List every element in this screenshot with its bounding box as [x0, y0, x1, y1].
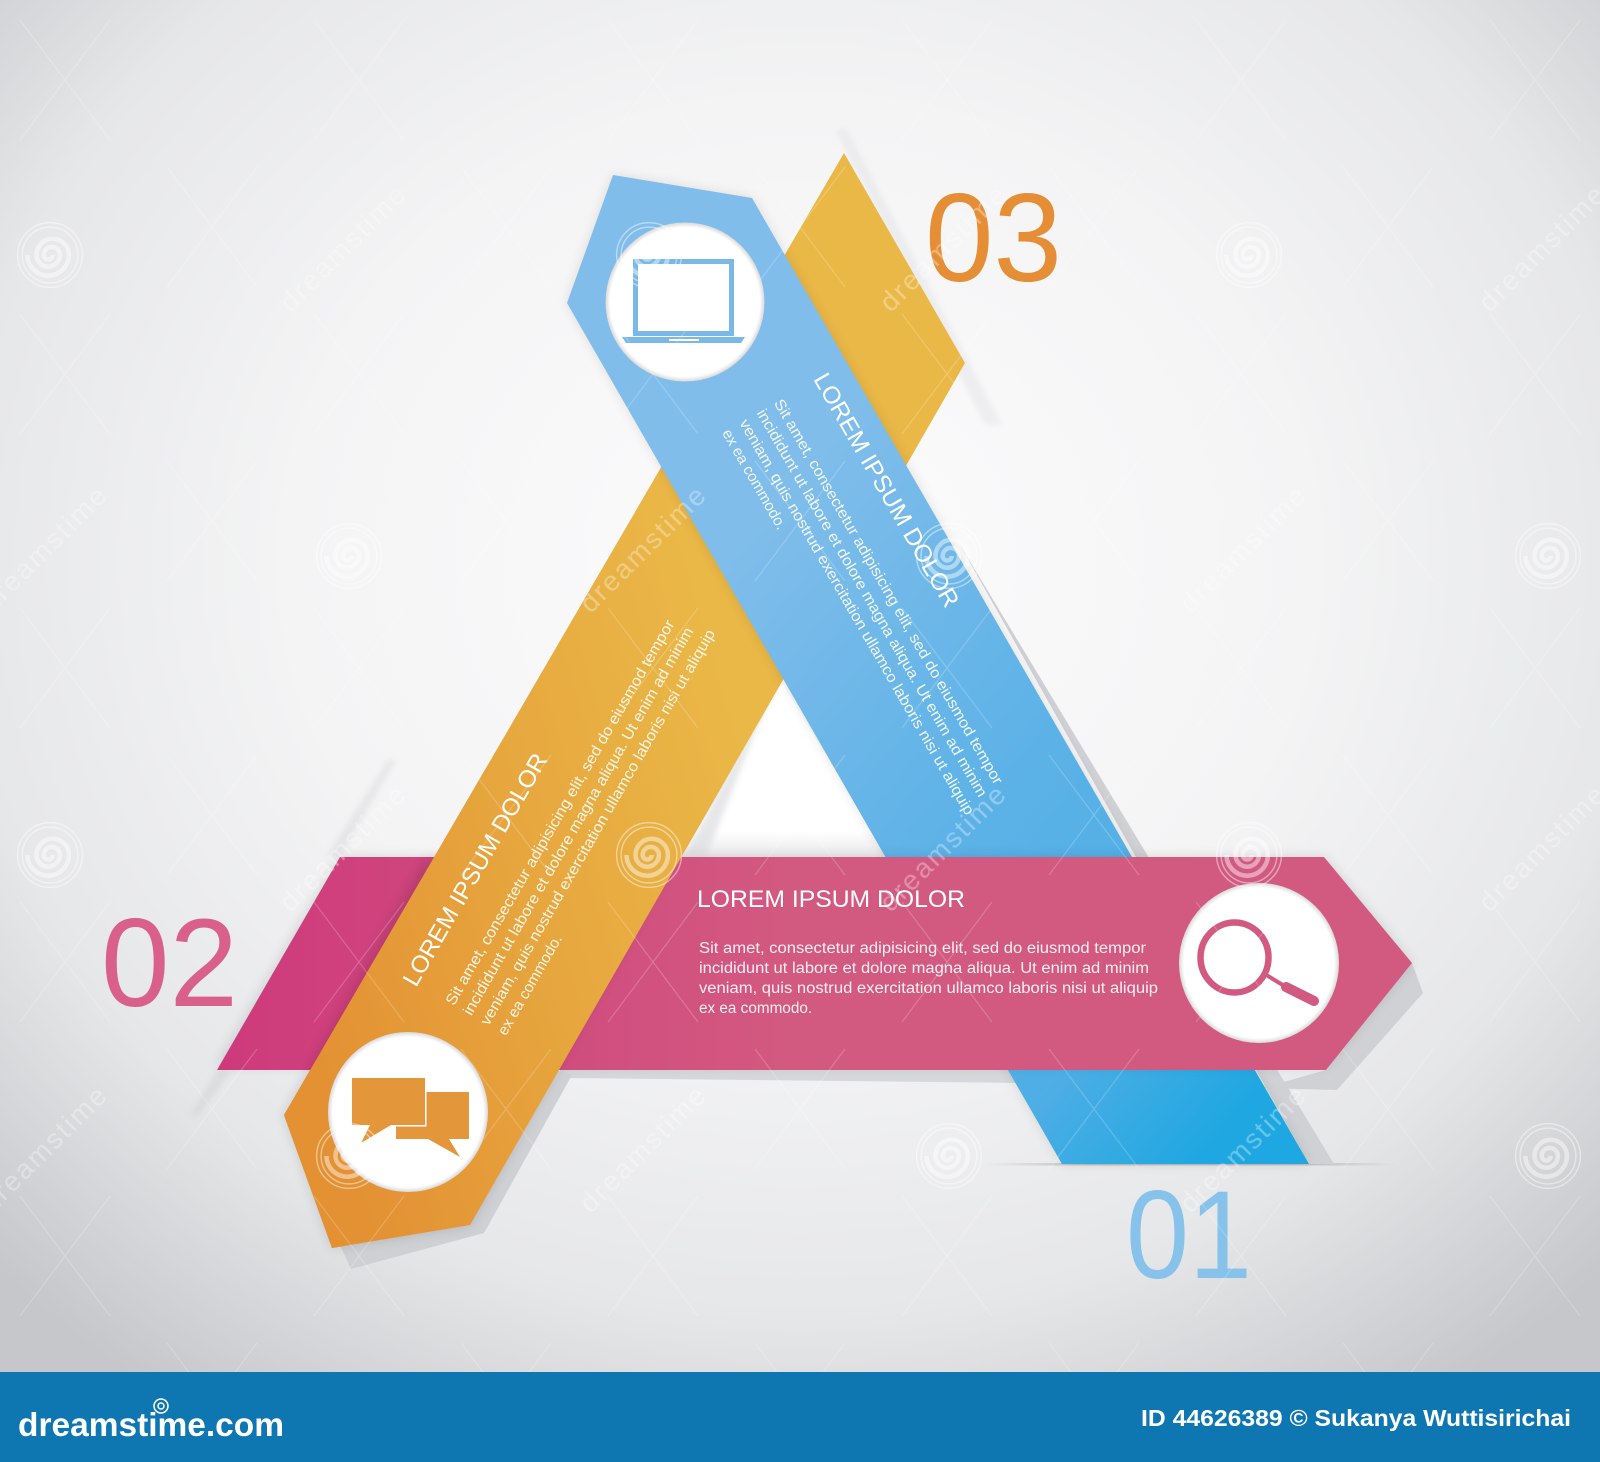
watermark overlay: dreamstime — [573, 1080, 712, 1219]
watermark overlay: dreamstime — [273, 779, 412, 918]
orange ribbon text — [398, 582, 736, 1041]
blue ribbon text: ex ea commodo. — [718, 426, 790, 533]
blue ribbon text — [718, 368, 1059, 828]
pink circle — [1179, 883, 1339, 1043]
pink ribbon text — [697, 886, 1158, 1017]
number 03: 03 — [925, 169, 1062, 308]
blue ribbon text: incididunt ut labore et dolore magna aliqua. Ut enim ad minim — [753, 406, 990, 800]
pink ribbon text: veniam, quis nostrud exercitation ullamco laboris nisi ut aliquip — [699, 980, 1158, 997]
number 02: 02 — [101, 894, 238, 1033]
orange ribbon text: Sit amet, consectetur adipisicing elit, sed do eiusmod tempor — [443, 617, 678, 1008]
orange ribbon text: LOREM IPSUM DOLOR — [398, 749, 553, 991]
panel: blue ribbon 01 — [567, 175, 1309, 1164]
orange ribbon cast shadow — [340, 1070, 572, 1269]
footer credit: ID 44626389 © Sukanya Wuttisirichai — [1141, 1405, 1571, 1431]
blue ribbon shape — [567, 175, 1309, 1164]
icon: magnifier — [1200, 922, 1314, 1001]
blue circle — [606, 222, 764, 382]
blue ribbon text: LOREM IPSUM DOLOR — [808, 368, 964, 612]
pink ribbon text: Sit amet, consectetur adipisicing elit, sed do eiusmod tempor — [699, 940, 1146, 957]
icon: laptop — [622, 262, 745, 343]
blue ribbon cast shadow — [960, 545, 1334, 1164]
watermark overlay: dreamstime — [873, 179, 1012, 318]
orange ribbon text: incididunt ut labore et dolore magna aliqua. Ut enim ad minim — [460, 625, 697, 1018]
watermark overlay: dreamstime — [873, 779, 1012, 918]
orange ribbon shape — [284, 770, 731, 1248]
number 01: 01 — [1126, 1166, 1252, 1305]
background paper cut streaks — [190, 128, 1395, 1166]
watermark overlay: dreamstime — [273, 179, 412, 318]
orange ribbon text: veniam, quis nostrud exercitation ullamco laboris nisi ut aliquip — [477, 627, 719, 1028]
panel: pink ribbon 02 — [217, 857, 1412, 1070]
orange ribbon text: ex ea commodo. — [495, 932, 566, 1038]
blue ribbon text: Sit amet, consectetur adipisicing elit, sed do eiusmod tempor — [770, 396, 1006, 788]
pink ribbon text: ex ea commodo. — [699, 1000, 812, 1017]
icon: chat bubbles — [352, 1078, 469, 1157]
footer logo spiral — [154, 1399, 168, 1413]
pink ribbon text: LOREM IPSUM DOLOR — [697, 886, 965, 913]
pink ribbon shape — [217, 857, 1412, 1070]
footer band — [0, 1372, 1600, 1462]
pink ribbon cast shadow — [560, 963, 1423, 1090]
watermark overlay: dreamstime — [1173, 480, 1312, 619]
orange circle — [328, 1032, 488, 1192]
blue ribbon text: veniam, quis nostrud exercitation ullamco laboris nisi ut aliquip — [736, 416, 977, 818]
watermark overlay: dreamstime — [1173, 1080, 1312, 1219]
footer logo text: dreamstime.com — [18, 1406, 284, 1443]
watermark overlay: dreamstime — [573, 480, 712, 619]
panel: orange ribbon 03 — [284, 582, 736, 1269]
blue ribbon soft shadow — [567, 175, 1309, 1164]
pink ribbon text: incididunt ut labore et dolore magna aliqua. Ut enim ad minim — [699, 960, 1149, 977]
pink ribbon soft shadow — [217, 857, 1412, 1066]
inner triangle highlight — [682, 684, 887, 857]
ribbon 03 upper layer: orange strip passing under the blue strip — [284, 153, 965, 1248]
orange ribbon soft shadow — [284, 860, 672, 1248]
